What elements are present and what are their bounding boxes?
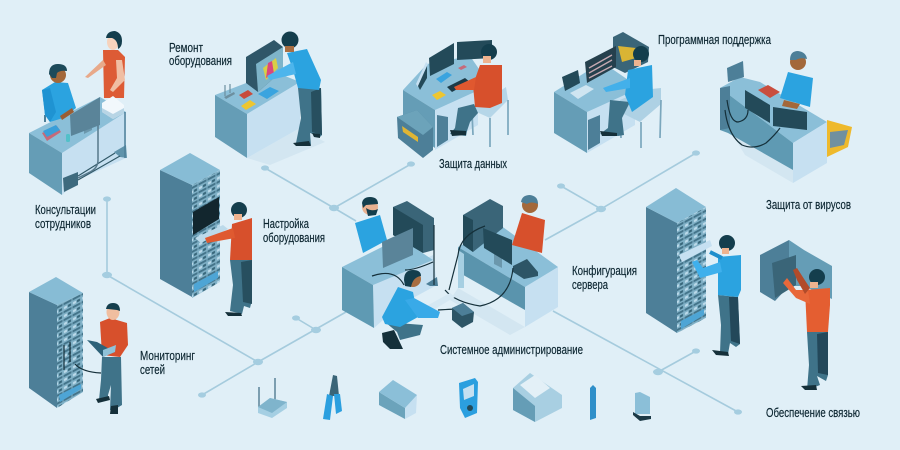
engineer xyxy=(783,268,830,390)
computer case xyxy=(397,110,433,158)
label: consultations: сотрудников xyxy=(35,216,91,231)
desk xyxy=(554,62,640,153)
label: network monitoring xyxy=(140,348,195,377)
right computer xyxy=(463,199,503,252)
title: repair: оборудования xyxy=(169,53,232,68)
wall cabinet xyxy=(760,240,832,301)
power strip xyxy=(423,293,455,313)
left desk xyxy=(342,238,438,328)
configuring engineer xyxy=(692,235,741,356)
icon: crimping pliers xyxy=(323,375,342,420)
scene: virus protection xyxy=(720,51,852,183)
repair technician xyxy=(267,32,322,146)
label: system administration: Системное администрирование xyxy=(440,342,583,357)
icon: cable tool xyxy=(590,385,596,420)
server rack xyxy=(646,188,712,333)
system unit xyxy=(720,86,730,130)
network administrator xyxy=(780,51,813,109)
three monitors xyxy=(416,40,492,90)
title: repair: Ремонт xyxy=(169,40,203,55)
label: server configuration xyxy=(572,263,637,292)
desk xyxy=(720,77,827,183)
standing woman xyxy=(85,31,125,98)
tower xyxy=(588,115,600,150)
label: equipment setup xyxy=(263,216,325,245)
programmer xyxy=(600,46,653,136)
shelf computer xyxy=(613,32,649,73)
crouching engineer xyxy=(382,270,440,349)
monitor xyxy=(70,97,100,136)
icon: mini router xyxy=(633,392,651,421)
chair xyxy=(472,87,508,147)
bearded administrator xyxy=(355,197,387,253)
label: consultations xyxy=(35,202,96,231)
two monitors xyxy=(745,90,807,130)
circuit boards xyxy=(239,87,279,110)
title: software support: Программная поддержка xyxy=(658,32,772,47)
cable xyxy=(64,342,101,373)
keyboard xyxy=(570,85,594,99)
keyboard block xyxy=(513,259,538,279)
desk items xyxy=(432,65,470,100)
title: data protection: Защита данных xyxy=(439,156,507,171)
label: equipment setup: Настройка xyxy=(263,216,310,231)
technician xyxy=(205,202,252,316)
label: communications: Обеспечение связью xyxy=(766,405,860,420)
seated employee xyxy=(42,64,76,122)
scene: equipment repair xyxy=(215,32,325,165)
storage box xyxy=(452,303,474,328)
label: server configuration: Конфигурация xyxy=(572,263,637,278)
right monitor xyxy=(483,228,512,268)
scene: system administration xyxy=(342,195,558,349)
desk xyxy=(403,56,490,150)
small monitor xyxy=(727,61,744,82)
printer xyxy=(102,96,124,119)
scene: data protection xyxy=(397,40,508,158)
operator xyxy=(450,44,502,136)
title: virus protection: Защита от вирусов xyxy=(766,197,851,212)
tablet xyxy=(562,70,580,91)
label: network monitoring: сетей xyxy=(140,362,165,377)
circuit board xyxy=(758,85,780,98)
right administrator xyxy=(512,195,545,253)
server rack xyxy=(160,153,228,298)
scene: equipment setup xyxy=(160,153,252,316)
cables xyxy=(725,100,780,147)
left computer xyxy=(393,201,434,253)
desk xyxy=(29,97,127,195)
tower xyxy=(437,115,448,147)
server rack xyxy=(29,277,83,408)
desk xyxy=(215,72,325,165)
scene: communications xyxy=(760,240,832,390)
open computer xyxy=(246,40,283,92)
title: repair xyxy=(169,40,232,68)
icon: tester xyxy=(459,378,478,418)
icon: printer xyxy=(513,373,562,422)
right desk xyxy=(450,225,558,335)
cables xyxy=(372,225,513,310)
open box xyxy=(827,120,852,157)
chair xyxy=(620,88,661,148)
scene: employee consultations xyxy=(29,31,127,195)
monitor xyxy=(585,46,616,83)
scene: network monitoring xyxy=(29,277,128,414)
scene: server configuration xyxy=(646,188,741,356)
label: equipment setup: оборудования xyxy=(263,230,325,245)
router xyxy=(224,84,235,99)
bottle xyxy=(66,134,70,142)
engineer xyxy=(87,303,128,414)
books xyxy=(42,125,61,141)
network lines xyxy=(102,150,742,415)
label: consultations: Консультации xyxy=(35,202,96,217)
label: server configuration: сервера xyxy=(572,277,609,292)
left monitor xyxy=(382,228,413,268)
icon: router xyxy=(258,378,287,418)
icon: switch box xyxy=(379,380,417,419)
scene: software support xyxy=(554,32,661,153)
label: network monitoring: Мониторинг xyxy=(140,348,195,363)
